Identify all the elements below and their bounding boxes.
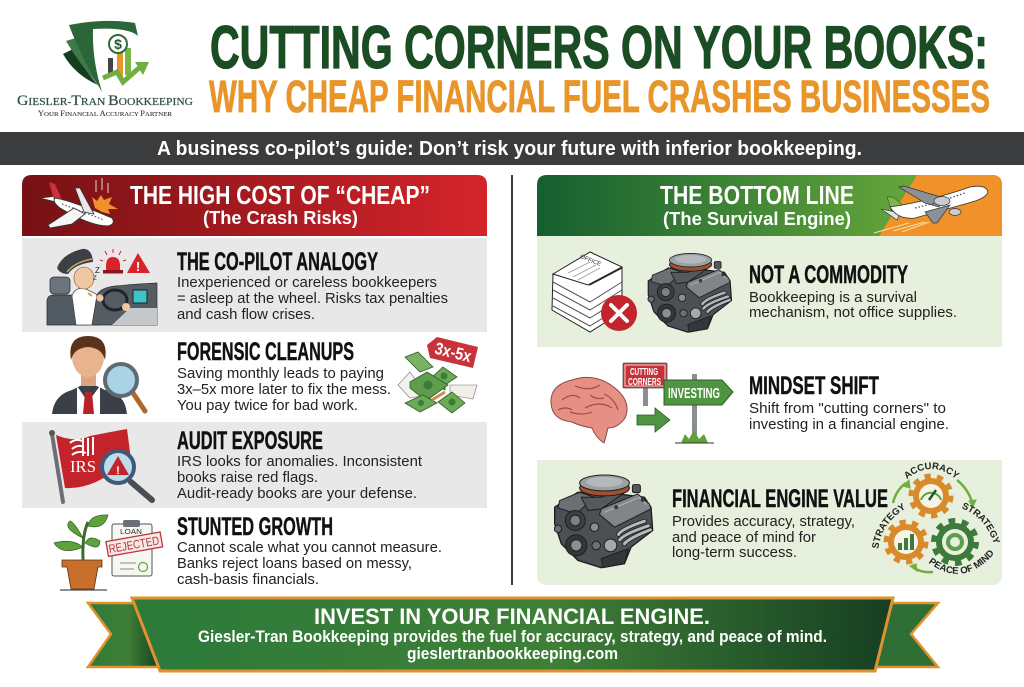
icon: gears cycle: STRATEGY: [962, 502, 1000, 542]
text: mindset body: Shift from "cutting corners" to: [749, 401, 946, 417]
text: growth body: Banks reject loans based on messy,: [177, 556, 412, 572]
icon: engine: [648, 253, 732, 332]
footer banner: INVEST IN YOUR FINANCIAL ENGINE.: [314, 604, 710, 629]
icon: crashing plane: [40, 178, 118, 228]
title: [209, 14, 990, 122]
icon: brain and signposts: INVESTING: [668, 385, 720, 402]
icon: cash pile with tag: [398, 337, 478, 413]
text: engine value body: [672, 514, 855, 561]
icon: plant and rejected loan: LOAN: [120, 527, 142, 536]
text: co-pilot body: Inexperienced or careless bookkeepers: [177, 275, 437, 291]
row: stunted growth: STUNTED GROWTH: [177, 513, 333, 541]
icon: IRS flag with magnifier: [49, 429, 152, 502]
row: forensic cleanups: [52, 336, 478, 414]
row: not a commodity: NOT A COMMODITY: [749, 261, 908, 289]
panel: survival engine: [537, 175, 1002, 585]
icon: IRS flag with magnifier: !: [116, 465, 120, 477]
text: forensic body: Saving monthly leads to paying: [177, 366, 384, 382]
text: commodity body: Bookkeeping is a survival: [749, 290, 917, 306]
icon: brain and signposts: CORNERS: [628, 377, 661, 388]
text: forensic body: 3x–5x more later to fix the mess.: [177, 382, 391, 398]
text: co-pilot body: [177, 275, 448, 323]
icon: gears cycle: ACCURACY: [905, 462, 960, 479]
text: mindset body: investing in a financial engine.: [749, 417, 949, 433]
footer banner: [88, 598, 938, 671]
text: mindset body: [749, 401, 949, 433]
row: audit exposure: [22, 422, 487, 508]
row: mindset shift: [551, 363, 949, 443]
text: growth body: [177, 540, 442, 588]
row: financial engine value: [537, 460, 1002, 585]
icon: sleeping pilot: Z: [95, 266, 100, 275]
text: co-pilot body: and cash flow crises.: [177, 307, 315, 323]
text: growth body: Cannot scale what you cannot measure.: [177, 540, 442, 556]
panel header: the bottom line: [537, 175, 1002, 236]
text: forensic body: You pay twice for bad work.: [177, 398, 358, 414]
logo: $: [114, 36, 122, 52]
panel header: the high cost of cheap: (The Crash Risks): [203, 207, 358, 228]
text: audit body: [177, 454, 422, 502]
row: stunted growth: [54, 513, 442, 590]
panel header: the high cost of cheap: THE HIGH COST OF “CHEAP”: [130, 180, 430, 210]
icon: sleeping pilot: Z: [93, 276, 97, 282]
icon: IRS flag with magnifier: IRS: [70, 457, 96, 476]
icon: paper stack rejected: [552, 252, 637, 332]
row: co-pilot analogy: [22, 238, 487, 332]
text: co-pilot body: = asleep at the wheel. Risks tax penalties: [177, 291, 448, 307]
row: co-pilot analogy: THE CO-PILOT ANALOGY: [177, 248, 378, 276]
subtitle band: A business co-pilot’s guide: Don’t risk your future with inferior bookkeeping.: [157, 138, 862, 160]
icon: brain and signposts: CUTTING: [630, 367, 658, 378]
footer banner: gieslertranbookkeeping.com: [407, 645, 618, 663]
panel header: the bottom line: (The Survival Engine): [663, 208, 851, 229]
text: growth body: cash-basis financials.: [177, 572, 319, 588]
panel header: the high cost of cheap: [22, 175, 487, 236]
icon: gears cycle: STRATEGY: [872, 502, 904, 548]
icon: plant and rejected loan: REJECTED: [108, 533, 160, 556]
icon: brain and signposts: [551, 363, 733, 443]
subtitle band: [0, 132, 1024, 165]
text: commodity body: mechanism, not office supplies.: [749, 305, 957, 321]
text: engine value body: Provides accuracy, strategy,: [672, 514, 855, 530]
row: audit exposure: AUDIT EXPOSURE: [177, 427, 323, 455]
row: financial engine value: FINANCIAL ENGINE VALUE: [672, 485, 888, 513]
icon: investigator: [52, 336, 145, 414]
icon: gears cycle: [872, 462, 1000, 574]
icon: engine: [554, 475, 653, 568]
footer banner: Giesler-Tran Bookkeeping provides the fuel for accuracy, strategy, and peace of mind.: [198, 628, 827, 646]
icon: cash pile with tag: 3x-5x: [433, 339, 474, 366]
icon: sleeping pilot: [47, 249, 157, 325]
logo: [17, 21, 193, 118]
icon: climbing plane: [874, 186, 988, 233]
row: not a commodity: [537, 236, 1002, 347]
icon: sleeping pilot: !: [136, 259, 140, 274]
panel: crash risks: [22, 175, 487, 590]
text: forensic body: [177, 366, 391, 414]
text: commodity body: [749, 290, 957, 321]
icon: gears cycle: PEACE OF MIND: [928, 550, 993, 574]
row: mindset shift: MINDSET SHIFT: [749, 372, 879, 400]
row: forensic cleanups: FORENSIC CLEANUPS: [177, 338, 354, 366]
text: audit body: Audit-ready books are your defense.: [177, 486, 417, 502]
logo: GIESLER-TRAN BOOKKEEPING: [17, 93, 193, 109]
text: audit body: books raise red flags.: [177, 470, 318, 486]
icon: paper stack rejected: OFFICE: [579, 254, 602, 268]
panel header: the bottom line: THE BOTTOM LINE: [660, 180, 854, 210]
logo: YOUR FINANCIAL ACCURACY PARTNER: [38, 109, 173, 118]
text: engine value body: and peace of mind for: [672, 530, 816, 546]
text: audit body: IRS looks for anomalies. Inconsistent: [177, 454, 422, 470]
icon: plant and rejected loan: [54, 515, 163, 590]
text: engine value body: long-term success.: [672, 545, 797, 561]
